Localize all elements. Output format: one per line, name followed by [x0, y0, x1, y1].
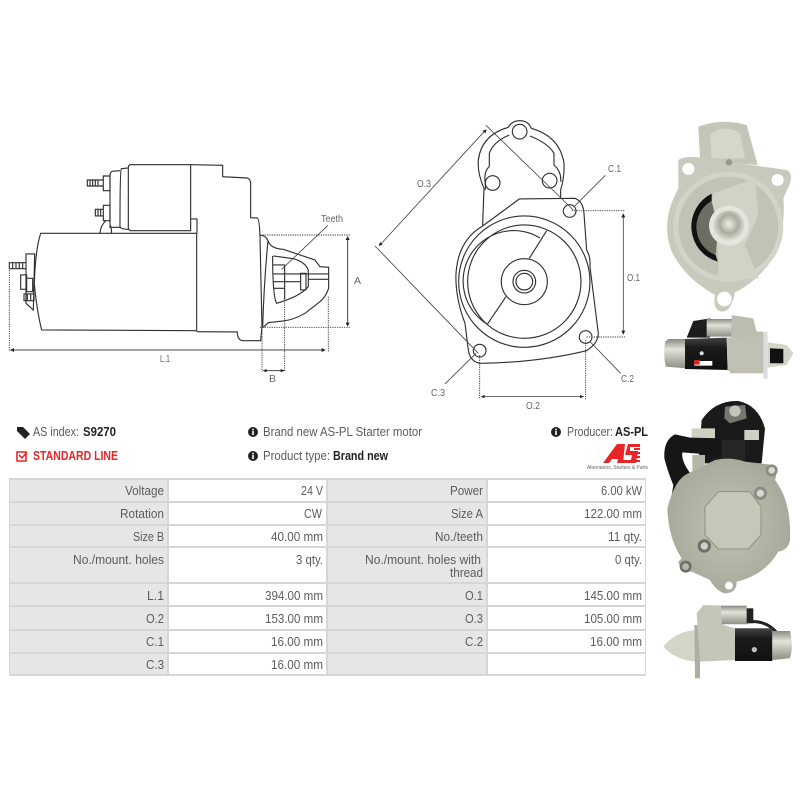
row: L.1, O.1: L.1 — [147, 588, 164, 603]
row: rotation, size A: CW — [304, 506, 323, 521]
icon: info — [248, 427, 258, 437]
row: voltage, power: 6.00 kW — [601, 483, 643, 498]
photo: rear of starter — [664, 401, 790, 593]
row: mounting holes: 3 qty. — [296, 552, 323, 567]
row: size B, teeth: 40.00 mm — [271, 529, 323, 544]
info row: producer — [551, 424, 648, 439]
rear terminals — [9, 254, 35, 310]
row: O.2, O.3: 105.00 mm — [584, 611, 642, 626]
AS-PL logo — [587, 444, 648, 471]
row: O.2, O.3: O.2 — [146, 611, 164, 626]
photo: side of starter, nose left — [663, 605, 792, 678]
icon: info — [551, 427, 561, 437]
row: size B, teeth — [133, 529, 642, 544]
value column 1 — [169, 480, 326, 674]
row: mounting holes: thread — [450, 565, 483, 580]
label: A: A — [354, 275, 361, 287]
row: rotation, size A: 122.00 mm — [584, 506, 642, 521]
label: O.3: O.3 — [417, 178, 431, 190]
icon: info — [248, 451, 258, 461]
info row: AS index — [17, 424, 116, 439]
flange and nose — [260, 235, 329, 327]
row: mounting holes: No./mount. holes with — [365, 552, 481, 567]
value column 2 — [488, 480, 645, 674]
info row: product type: Brand new — [333, 448, 389, 463]
photo: side of starter with black body — [664, 315, 793, 379]
info row: AS index: AS index: — [33, 424, 79, 439]
row: L.1, O.1: 394.00 mm — [265, 588, 323, 603]
pinion detail — [273, 256, 328, 303]
row: voltage, power — [125, 483, 643, 498]
row: rotation, size A: Size A — [451, 506, 483, 521]
label: C.1: C.1 — [608, 163, 621, 175]
mounting flange — [456, 198, 598, 363]
row: C.1, C.2: 16.00 mm — [271, 634, 323, 649]
row: O.2, O.3: 153.00 mm — [265, 611, 323, 626]
label: O.2: O.2 — [526, 400, 540, 412]
info row: AS index: S9270 — [83, 424, 116, 439]
row: size B, teeth: 11 qty. — [608, 529, 642, 544]
motor body outline — [34, 233, 197, 331]
row: L.1, O.1: O.1 — [465, 588, 483, 603]
label: Teeth: Teeth — [321, 213, 343, 225]
row: mounting holes — [73, 552, 642, 580]
row: O.2, O.3: O.3 — [465, 611, 483, 626]
row: C.1, C.2: C.2 — [465, 634, 483, 649]
row: size B, teeth: Size B — [133, 529, 164, 544]
row: rotation, size A: Rotation — [120, 506, 164, 521]
row: C.1, C.2: C.1 — [146, 634, 164, 649]
drive housing — [191, 165, 262, 341]
row: C.3 — [146, 657, 323, 672]
row: C.1, C.2: 16.00 mm — [590, 634, 642, 649]
wire loom — [664, 434, 722, 507]
upper rear plate — [478, 121, 564, 225]
AS-PL logo: Alternators, Starters & Parts — [587, 465, 648, 471]
info row: product type: Product type: — [263, 448, 330, 463]
label: O.1: O.1 — [627, 272, 640, 284]
dimension lines: front view — [375, 125, 625, 399]
label: B: B — [269, 373, 276, 385]
solenoid — [100, 165, 191, 233]
label: C.3: C.3 — [431, 387, 445, 399]
row: C.3: 16.00 mm — [271, 657, 323, 672]
label: L.1: L.1 — [160, 353, 170, 365]
teeth leader — [282, 225, 328, 269]
label column 2 — [328, 480, 486, 674]
row: voltage, power: 24 V — [301, 483, 323, 498]
info row: product type — [248, 448, 389, 463]
photo: front of starter — [667, 122, 791, 312]
row: L.1, O.1: 145.00 mm — [584, 588, 642, 603]
row: C.3: C.3 — [146, 657, 164, 672]
row: C.1, C.2 — [146, 634, 642, 649]
row: voltage, power: Power — [450, 483, 484, 498]
row: mounting holes: 0 qty. — [615, 552, 642, 567]
icon: checkbox — [17, 452, 27, 461]
icon: tags — [17, 427, 30, 439]
info row: brand new starter: Brand new AS-PL Starter motor — [263, 424, 423, 439]
side-view technical drawing — [9, 165, 329, 341]
info row: producer: Producer: — [567, 424, 613, 439]
front-view technical drawing — [456, 121, 598, 363]
label: C.2: C.2 — [621, 373, 634, 385]
row: O.2, O.3 — [146, 611, 642, 626]
dimension lines: side view — [9, 225, 350, 372]
row: voltage, power: Voltage — [125, 483, 164, 498]
info row: producer: AS-PL — [615, 424, 648, 439]
row: rotation, size A — [120, 506, 642, 521]
label column 1 — [10, 480, 167, 674]
mounting holes — [563, 205, 576, 217]
concentric rings — [459, 216, 590, 347]
row: mounting holes: No./mount. holes — [73, 552, 164, 567]
specification table — [9, 478, 646, 676]
standard line badge: STANDARD LINE — [33, 448, 118, 463]
row: size B, teeth: No./teeth — [435, 529, 483, 544]
row: L.1, O.1 — [147, 588, 642, 603]
solenoid terminals — [87, 176, 110, 221]
